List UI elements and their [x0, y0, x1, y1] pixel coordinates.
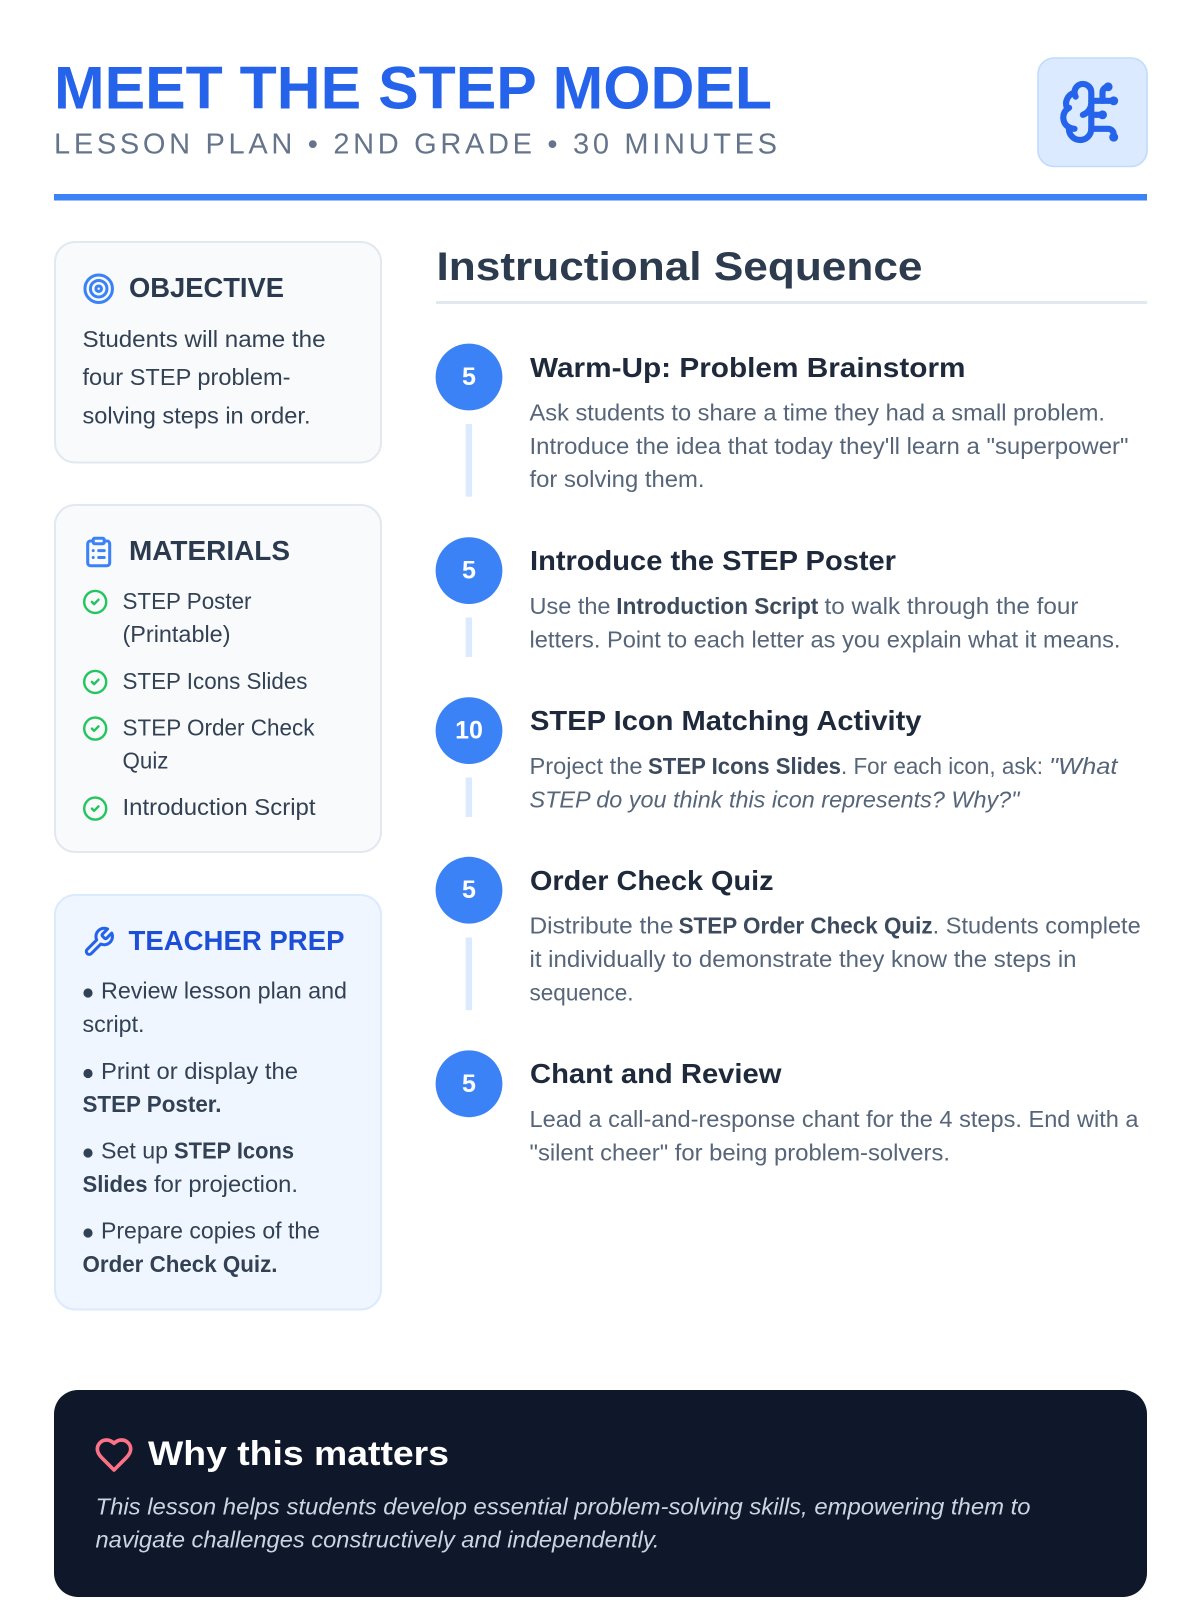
material: STEP Icons Slides: STEP Icons Slides: [122, 668, 308, 694]
step 5: chant and review: [436, 1050, 1139, 1165]
heading: objective: OBJECTIVE: [129, 272, 284, 303]
time badge: 5 minutes: 5: [462, 1070, 476, 1098]
why text: This lesson helps students develop essential problem-solving skills, empowering them to: [96, 1493, 1031, 1519]
time badge: 5 minutes: [436, 857, 502, 924]
time badge: 5 minutes: [436, 344, 502, 410]
step description: Ask students to share a time they had a small problem.: [530, 400, 1105, 426]
step 3: icon matching: [436, 697, 1119, 817]
prep item: print poster: Print or display the: [101, 1058, 298, 1084]
subtitle: LESSON PLAN • 2ND GRADE • 30 MINUTES: [54, 128, 777, 160]
step description: sequence.: [530, 979, 634, 1005]
material: STEP Order Check Quiz: [84, 714, 315, 774]
objective text: four STEP problem-: [82, 364, 290, 390]
prep item: prepare copies: Order Check Quiz.: [82, 1251, 278, 1277]
step description: [530, 1106, 1139, 1165]
step description: Project the: [530, 753, 642, 779]
step title: STEP Icon Matching Activity: [530, 705, 922, 736]
step description: Introduce the idea that today they'll learn a "superpower": [530, 433, 1128, 459]
step description: "What: [1049, 753, 1119, 779]
step title: Chant and Review: [530, 1058, 782, 1089]
heading: materials: MATERIALS: [129, 535, 290, 566]
icon: heart: [97, 1440, 131, 1470]
prep item: set up slides: [82, 1138, 298, 1197]
step description: letters. Point to each letter as you explain what it means.: [530, 626, 1120, 652]
step 1: warm-up: [436, 344, 1129, 497]
material: Introduction Script: Introduction Script: [122, 794, 316, 820]
time badge: 10 minutes: 10: [455, 717, 483, 745]
step description: [530, 400, 1128, 492]
material: STEP Order Check Quiz: Quiz: [122, 748, 168, 774]
icon: clipboard: [88, 538, 110, 566]
material: STEP Poster: (Printable): [122, 621, 230, 647]
step description: Lead a call-and-response chant for the 4 steps. End with a: [530, 1106, 1139, 1132]
step description: Introduction Script: [616, 593, 819, 619]
step description: . For each icon, ask:: [841, 753, 1043, 779]
step description: "silent cheer" for being problem-solvers.: [530, 1139, 950, 1165]
panel: materials: [55, 505, 381, 852]
time badge: 5 minutes: 5: [462, 557, 476, 585]
step title: Order Check Quiz: [530, 865, 774, 896]
heading: instructional sequence: Instructional Sequence: [436, 245, 922, 289]
step description: [530, 913, 1141, 1005]
prep item: prepare copies: Prepare copies of the: [101, 1218, 320, 1244]
step description: [530, 753, 1119, 812]
objective text: [82, 326, 326, 428]
prep item: print poster: STEP Poster.: [82, 1091, 222, 1117]
step description: Distribute the: [530, 913, 674, 939]
icon: target: [85, 275, 112, 302]
prep item: set up slides: for projection.: [154, 1171, 298, 1197]
step description: for solving them.: [530, 466, 704, 492]
time badge: 5 minutes: 5: [462, 876, 476, 904]
step description: . Students complete: [933, 913, 1141, 939]
time badge: 5 minutes: [436, 1050, 502, 1117]
prep item: review: Review lesson plan and: [101, 978, 347, 1004]
step 2: introduce the poster: [436, 537, 1121, 657]
step description: STEP Icons Slides: [648, 753, 841, 779]
heading: teacher prep: TEACHER PREP: [128, 925, 344, 956]
step description: STEP Order Check Quiz: [679, 913, 933, 939]
step description: to walk through the four: [824, 593, 1079, 619]
step 4: order check quiz: [436, 857, 1141, 1010]
heading: why this matters: Why this matters: [148, 1435, 449, 1473]
material: STEP Poster: [84, 588, 252, 647]
step description: [530, 593, 1120, 652]
objective text: solving steps in order.: [82, 402, 310, 428]
time badge: 10 minutes: [436, 697, 502, 764]
panel: objective: [55, 242, 381, 462]
prep item: prepare copies: [82, 1218, 320, 1277]
panel: why this matters: [54, 1390, 1147, 1597]
title: MEET THE STEP MODEL: [54, 54, 772, 122]
step title: Introduce the STEP Poster: [530, 545, 896, 576]
header: [54, 54, 1147, 166]
prep item: set up slides: Slides: [82, 1171, 148, 1197]
icon: brain circuit: [1038, 58, 1147, 166]
why text: navigate challenges constructively and independently.: [96, 1527, 660, 1553]
time badge: 5 minutes: 5: [462, 363, 476, 391]
why text: [96, 1493, 1031, 1553]
prep item: set up slides: STEP Icons: [174, 1138, 294, 1164]
prep item: print poster: [82, 1058, 298, 1117]
step title: Warm-Up: Problem Brainstorm: [530, 352, 966, 383]
step description: STEP do you think this icon represents? Why?": [530, 786, 1021, 812]
prep item: set up slides: Set up: [101, 1138, 168, 1164]
panel: teacher prep: [55, 895, 381, 1310]
step description: Use the: [530, 593, 610, 619]
prep item: review: script.: [82, 1011, 144, 1037]
material: STEP Poster: STEP Poster: [122, 588, 252, 614]
icon: wrench: [86, 928, 112, 954]
material: STEP Order Check Quiz: STEP Order Check: [122, 714, 315, 740]
prep item: review: [82, 978, 347, 1037]
step description: it individually to demonstrate they know the steps in: [530, 946, 1076, 972]
time badge: 5 minutes: [436, 537, 502, 604]
objective text: Students will name the: [82, 326, 326, 352]
